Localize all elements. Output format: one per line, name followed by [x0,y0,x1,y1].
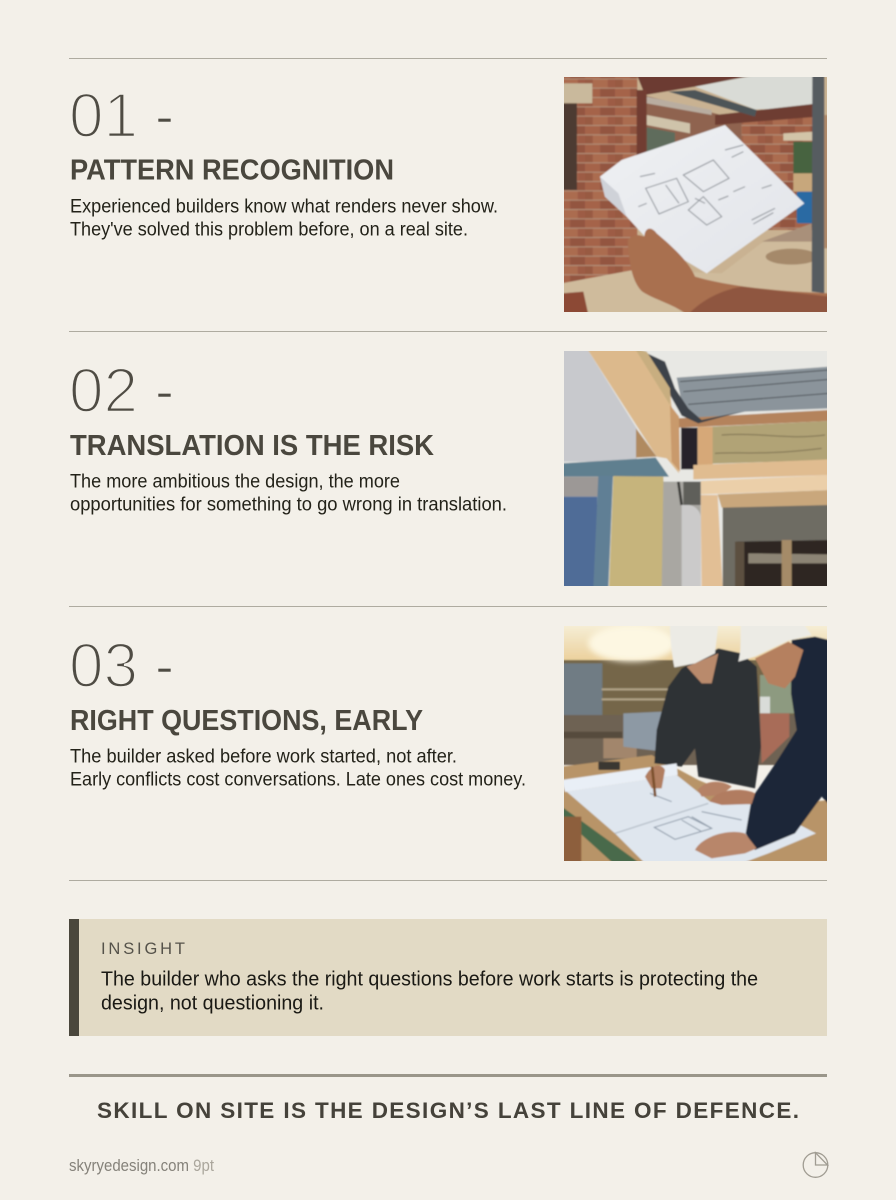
number 02: - [155,357,174,424]
panel: 01 pattern recognition [69,75,829,314]
icon: pie chart logo [803,1153,828,1177]
number 03: - [155,632,174,699]
section dividers [69,58,827,881]
number 03 [69,631,174,701]
callout text: design, not questioning it. [101,992,324,1014]
number 01: 01 [69,81,138,151]
callout accent bar [69,919,79,1036]
body text: The builder asked before work started, not after. [70,746,457,768]
photo: two builders reviewing plans [564,626,827,861]
number 02 [69,356,174,426]
closing statement: SKILL ON SITE IS THE DESIGN’S LAST LINE OF DEFENCE. [97,1098,799,1123]
body text [70,196,498,240]
number 02: 02 [69,356,138,426]
body text: Experienced builders know what renders never show. [70,196,498,218]
body text: Early conflicts cost conversations. Late ones cost money. [70,770,526,790]
body text: The more ambitious the design, the more [70,472,400,492]
callout: insight [69,919,827,1036]
body text: They've solved this problem before, on a real site. [70,220,468,240]
number 03: 03 [69,631,138,701]
callout text [101,968,758,1014]
heading: TRANSLATION IS THE RISK [70,430,434,462]
number 01 [69,81,174,151]
photo: junction of roof, timber and insulation [564,351,827,586]
number 01: - [155,82,174,149]
footer credit: skyryedesign.com 9pt [69,1156,214,1175]
callout background [69,919,827,1036]
panel: 02 translation is the risk [69,349,829,588]
panel: 03 right questions, early [69,624,829,863]
heading: PATTERN RECOGNITION [70,154,394,186]
heading: RIGHT QUESTIONS, EARLY [70,705,423,737]
callout text: The builder who asks the right questions before work starts is protecting the [101,968,758,990]
callout label: INSIGHT [101,940,185,958]
body text: opportunities for something to go wrong in translation. [70,494,507,516]
closing rule [69,1074,827,1077]
photo: hand holding floor plan on brick site [564,77,827,312]
body text [70,472,507,516]
body text [70,746,526,790]
